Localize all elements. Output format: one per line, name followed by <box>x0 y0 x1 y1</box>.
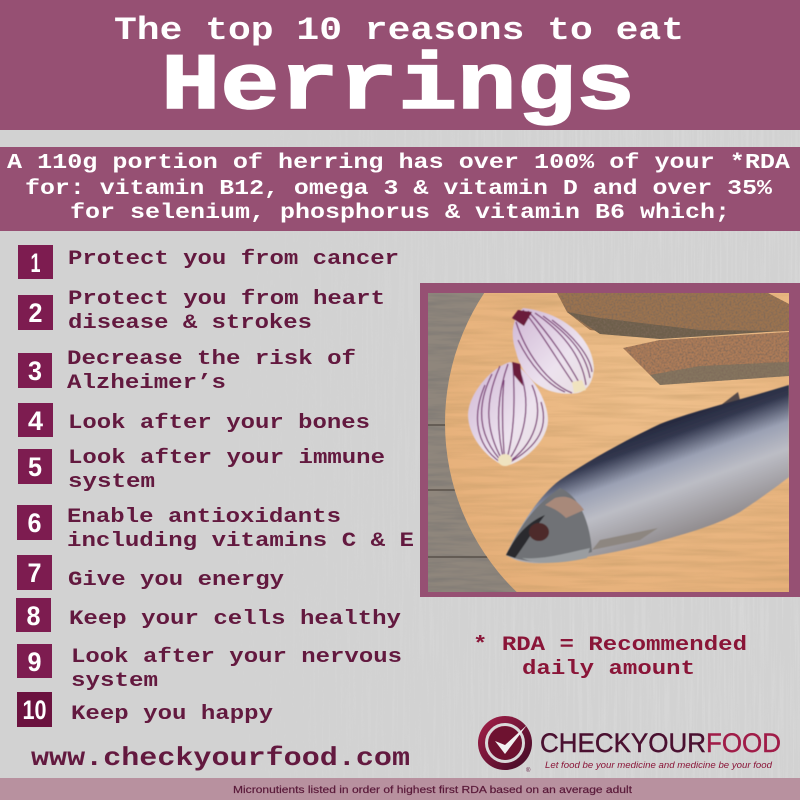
footer bar <box>0 778 800 800</box>
reason 5 <box>18 447 385 494</box>
reason 4 <box>18 403 370 437</box>
reason 5: 5 <box>28 452 42 482</box>
footnote: RDA definition: * RDA = Recommended <box>473 634 747 657</box>
reason 1: Protect you from cancer <box>68 248 399 271</box>
reason 7: 7 <box>28 558 42 588</box>
reason 3: 3 <box>28 356 42 386</box>
reason 3 <box>18 348 356 395</box>
reason 2: Protect you from heart <box>68 288 385 311</box>
reason 7: Give you energy <box>68 569 284 592</box>
wood table <box>428 293 516 592</box>
reason 2: disease & strokes <box>68 312 312 335</box>
logo tagline: Let food be your medicine and medicine be your food <box>545 760 773 771</box>
intro banner: for selenium, phosphorus & vitamin B6 which; <box>70 202 730 225</box>
reason 4: 4 <box>28 406 43 436</box>
reason 4: Look after your bones <box>68 412 370 435</box>
reason 5: system <box>68 471 155 494</box>
chopping board <box>445 293 789 592</box>
logo icon: ® <box>526 767 531 774</box>
reason 10 <box>17 692 273 727</box>
header banner <box>0 0 800 130</box>
reason 8: 8 <box>26 601 40 631</box>
reason 3: Decrease the risk of <box>67 348 356 371</box>
logo icon <box>478 716 532 774</box>
bread slices <box>557 293 789 385</box>
reason 10: 10 <box>22 695 46 725</box>
intro banner: for: vitamin B12, omega 3 & vitamin D and over 35% <box>25 178 772 201</box>
reason 6: including vitamins C & E <box>67 530 414 553</box>
reason 2 <box>18 288 385 335</box>
reason 8: Keep your cells healthy <box>69 608 401 631</box>
reason 9 <box>17 644 402 693</box>
footnote: RDA definition <box>473 634 747 681</box>
photo panel: herring on a board <box>420 283 800 597</box>
logo: Check Your Food <box>478 716 781 774</box>
reason 9: 9 <box>28 647 42 677</box>
reason 9: Look after your nervous <box>71 646 402 669</box>
reason 1: 1 <box>30 248 40 278</box>
reason 8 <box>16 598 401 632</box>
title line: The top 10 reasons to eat <box>114 12 684 49</box>
website address: www.checkyourfood.com <box>31 743 410 773</box>
footer note: Micronutients listed in order of highest first RDA based on an average adult <box>233 785 632 796</box>
reason 6: 6 <box>28 508 42 538</box>
back onion <box>512 308 594 394</box>
reason 10: Keep you happy <box>71 703 273 726</box>
reason 3: Alzheimer’s <box>67 372 226 395</box>
intro banner: A 110g portion of herring has over 100% of your *RDA <box>7 152 790 175</box>
reason 5: Look after your immune <box>68 447 385 470</box>
main title: Herrings <box>161 42 635 133</box>
reason 6 <box>17 505 414 553</box>
reason 6: Enable antioxidants <box>67 506 341 529</box>
front onion <box>468 362 548 466</box>
reason 9: system <box>71 670 158 693</box>
herring <box>506 385 789 563</box>
logo wordmark: CHECKYOURFOOD <box>540 728 781 758</box>
intro banner <box>0 147 800 231</box>
reason 1 <box>18 245 399 279</box>
reason 2: 2 <box>28 298 42 328</box>
reason 7 <box>17 555 284 592</box>
footnote: RDA definition: daily amount <box>522 658 695 681</box>
